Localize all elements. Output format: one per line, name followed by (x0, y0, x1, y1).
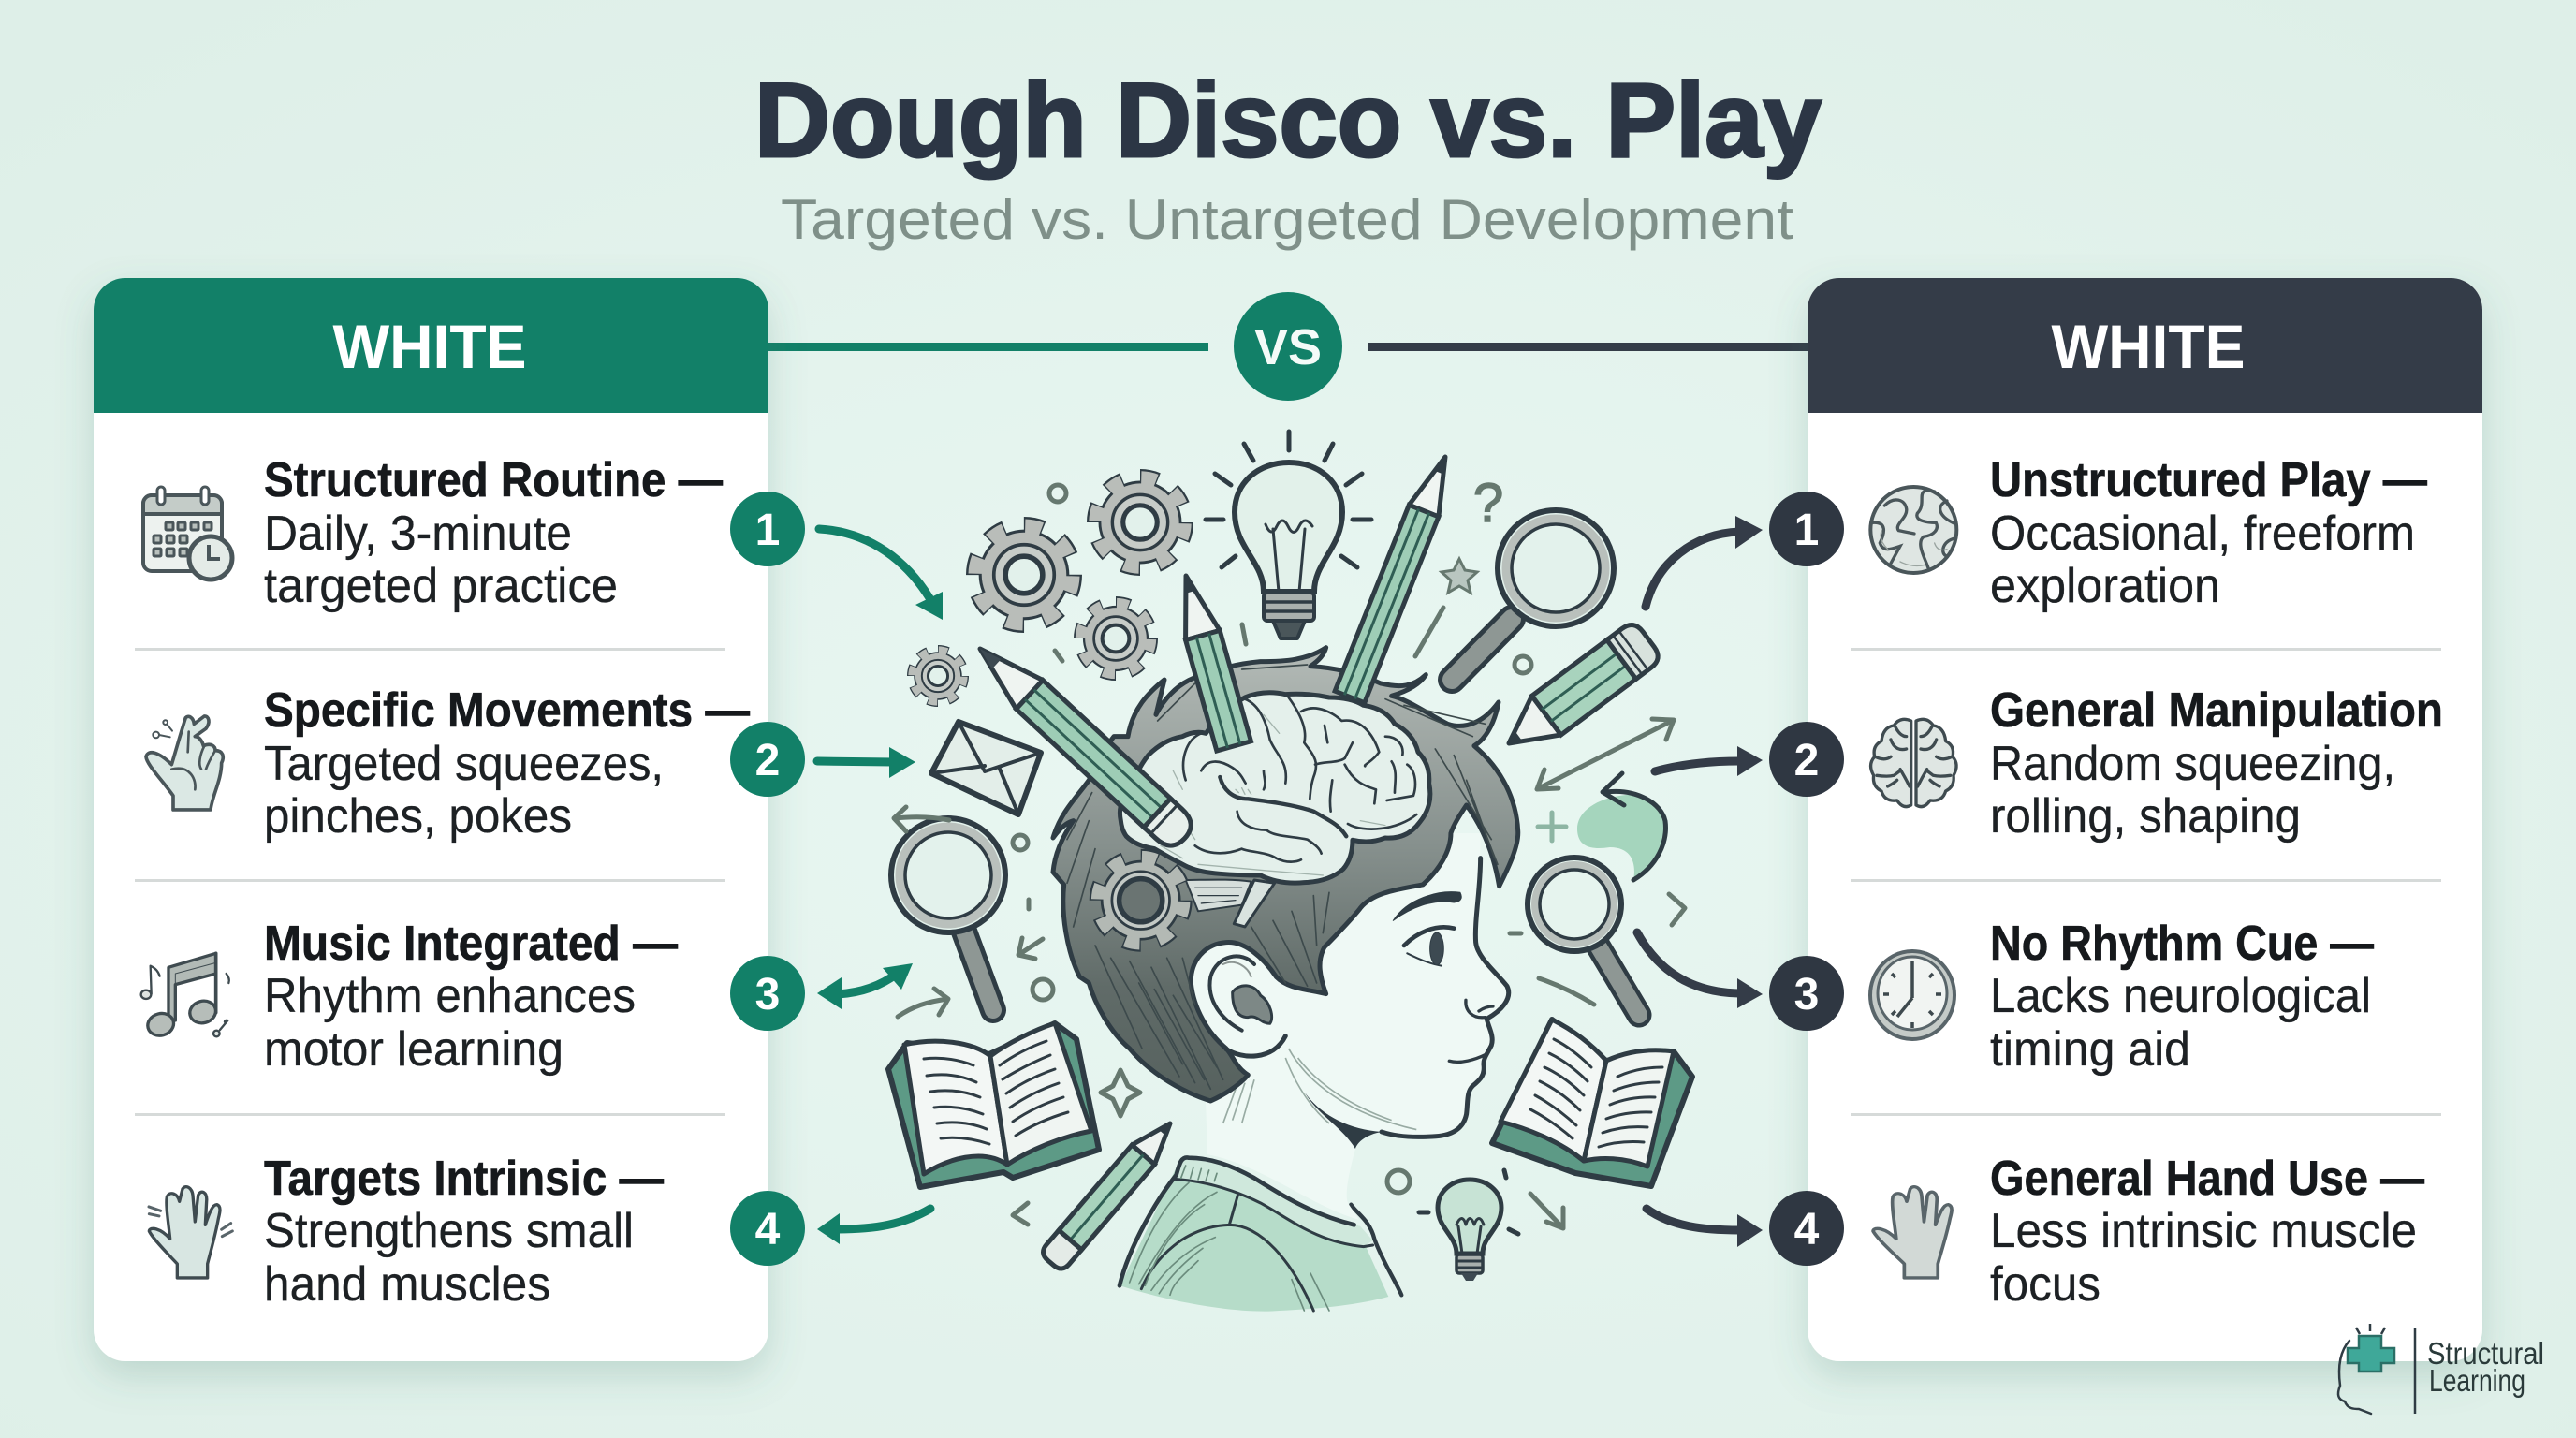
left item 4 text (264, 1152, 664, 1312)
arrow 2 right (1655, 746, 1763, 776)
left item 2 text: Targeted squeezes, (264, 737, 664, 791)
icon: open hand (149, 1187, 232, 1278)
badge left 1 (730, 492, 805, 566)
left item 1 text: Structured Routine — (264, 453, 723, 507)
book: left (888, 1023, 1099, 1187)
icon: grey hand (1873, 1187, 1952, 1278)
logo wordmark: Structural (2427, 1336, 2544, 1371)
right item 4 text (1990, 1152, 2424, 1312)
icon: calendar with clock (143, 487, 232, 580)
left item 3 text: Rhythm enhances (264, 969, 636, 1023)
right item 1 text (1990, 453, 2427, 613)
pencil: short right (1494, 620, 1663, 763)
badge left 3 (730, 956, 805, 1031)
small light bulb (1419, 1170, 1518, 1281)
logo wordmark: Learning (2429, 1363, 2525, 1398)
magnifier: lower right (1528, 858, 1639, 1015)
right item 2 text: Random squeezing, (1990, 737, 2395, 791)
logo wordmark (2427, 1336, 2544, 1398)
left header label: WHITE (333, 312, 526, 381)
VS badge (1234, 292, 1342, 401)
right dividers (1852, 648, 2441, 1116)
shirt (1120, 1157, 1401, 1312)
badge right 3: 3 (1794, 970, 1819, 1020)
right item 4 text: focus (1990, 1257, 2100, 1312)
left item 3 text: motor learning (264, 1022, 564, 1077)
right header label: WHITE (2052, 312, 2245, 381)
arrow 4 right (1647, 1209, 1763, 1247)
eye and brow (1393, 892, 1461, 966)
VS badge: VS (1254, 319, 1322, 375)
badge right 2: 2 (1794, 736, 1819, 785)
left item 3 text: Music Integrated — (264, 917, 678, 971)
decorative small marks (894, 473, 1685, 1228)
badge left 2: 2 (755, 736, 780, 785)
number badges: right (1769, 492, 1844, 1266)
left item 4 text: Strengthens small (264, 1204, 634, 1258)
right item 4 text: Less intrinsic muscle (1990, 1204, 2417, 1258)
panel: left targeted (94, 278, 768, 1361)
illustration: child with brain and learning tools (888, 432, 1692, 1312)
logo divider (2414, 1328, 2416, 1414)
left item 2 text: Specific Movements — (264, 683, 750, 738)
icon: pinching hand (146, 716, 223, 810)
green speech blob with arrow (1577, 773, 1665, 880)
gears cluster (912, 477, 1185, 702)
face profile line (1382, 858, 1509, 1137)
badge right 4 (1769, 1191, 1844, 1266)
icon: brain (1871, 719, 1956, 807)
badge left 2 (730, 722, 805, 797)
left item 2 text (264, 683, 750, 844)
icon: music notes (141, 953, 229, 1038)
subtitle: Targeted vs. Untargeted Development (781, 188, 1793, 251)
left item 1 text (264, 453, 723, 613)
hair (1053, 648, 1518, 1101)
right item 1 text: Unstructured Play — (1990, 453, 2427, 507)
left item 1 text: targeted practice (264, 559, 618, 613)
badge right 2 (1769, 722, 1844, 797)
left dividers (135, 648, 725, 1116)
right item 1 text: Occasional, freeform (1990, 506, 2415, 561)
right item 1 text: exploration (1990, 559, 2220, 613)
badge right 1 (1769, 492, 1844, 566)
gear in hair (1097, 858, 1184, 944)
left panel header (94, 278, 768, 413)
right item 2 text: General Manipulation (1990, 683, 2443, 738)
title: Dough Disco vs. Play (754, 62, 1822, 179)
left item 2 text: pinches, pokes (264, 789, 572, 844)
left item 3 text (264, 917, 678, 1077)
right item 3 text: timing aid (1990, 1022, 2190, 1077)
arrow 3 right (1637, 932, 1763, 1008)
magnifier: top right (1452, 510, 1614, 680)
panel: right untargeted (1808, 278, 2482, 1361)
icon: clock (1870, 951, 1954, 1039)
badge right 4: 4 (1794, 1205, 1820, 1255)
face and neck (1142, 833, 1509, 1220)
arrow 4 left (817, 1209, 930, 1244)
logo: Structural Learning (2338, 1324, 2544, 1414)
badge left 4: 4 (755, 1205, 781, 1255)
badge right 3 (1769, 956, 1844, 1031)
left item 1 text: Daily, 3-minute (264, 506, 572, 561)
arrow 1 left (819, 529, 943, 620)
light bulb top (1206, 432, 1371, 638)
logo head outline (2338, 1341, 2371, 1414)
right panel header (1808, 278, 2482, 413)
pencil: bottom (1039, 1114, 1181, 1272)
arrows: right group (1637, 516, 1763, 1247)
arrow 1 right (1646, 516, 1763, 607)
right item 3 text: No Rhythm Cue — (1990, 917, 2374, 971)
jaw shadow (1305, 1093, 1382, 1149)
arrow 3 left two-way (817, 963, 913, 1009)
pencil: left long (967, 635, 1198, 853)
right item 3 text: Lacks neurological (1990, 969, 2371, 1023)
pencil: right long (1335, 451, 1460, 703)
left item 4 text: Targets Intrinsic — (264, 1152, 664, 1206)
badge left 4 (730, 1191, 805, 1266)
logo cross (2348, 1336, 2394, 1372)
decorative small marks: ? (1473, 473, 1503, 534)
arrow 2 left (817, 747, 915, 778)
ear (1209, 956, 1285, 1056)
badge right 1: 1 (1794, 506, 1819, 555)
right item 2 text: rolling, shaping (1990, 789, 2301, 844)
left item 4 text: hand muscles (264, 1257, 550, 1312)
badge left 1: 1 (755, 506, 780, 555)
magnifier: left (891, 818, 1005, 1010)
right item 2 text (1990, 683, 2443, 844)
icon: globe (1870, 487, 1956, 573)
logo sparks (2356, 1324, 2385, 1334)
connector lines to VS badge (768, 343, 1808, 351)
book: right (1492, 1020, 1692, 1186)
right item 4 text: General Hand Use — (1990, 1152, 2424, 1206)
brain (1120, 693, 1430, 927)
pencil: centre (1169, 571, 1251, 751)
right item 3 text (1990, 917, 2374, 1077)
badge left 3: 3 (755, 970, 780, 1020)
envelope (931, 722, 1041, 814)
number badges: left (730, 492, 805, 1266)
arrows: left group (817, 529, 943, 1244)
nose and mouth (1449, 1000, 1493, 1062)
